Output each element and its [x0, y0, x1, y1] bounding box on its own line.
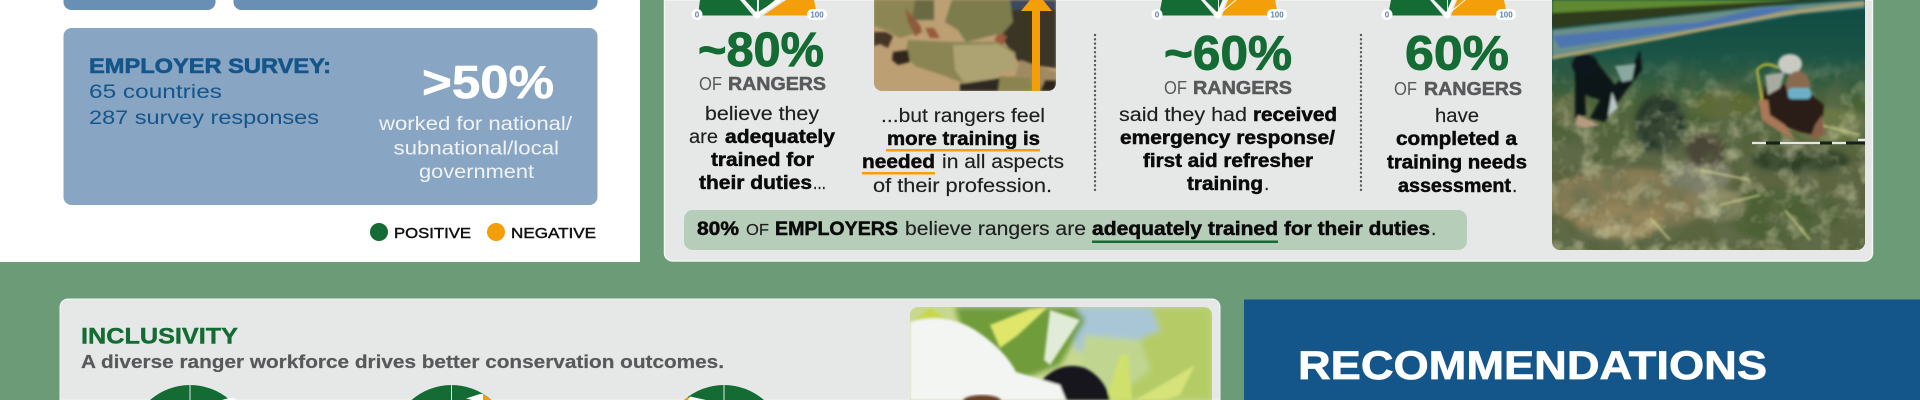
text: more training is needed: in all aspects	[942, 152, 1064, 173]
text: believe they are adequately trained: trained for	[711, 150, 815, 171]
text: received first aid refresher	[1119, 105, 1337, 195]
panel: inclusivity	[60, 299, 1220, 400]
text: more training is needed	[862, 106, 1064, 197]
stat box: right top	[234, 0, 598, 10]
stat: about 60 percent of rangers: ~60%	[1164, 28, 1292, 80]
text: believe they are adequately trained: ...	[813, 173, 826, 194]
employer survey box	[64, 28, 598, 205]
text: received first aid refresher: training	[1187, 174, 1263, 195]
stat: 60 percent of rangers: RANGERS	[1424, 79, 1522, 99]
text: completed a training needs assessment: training needs	[1387, 152, 1527, 174]
text: completed a training needs assessment: completed a	[1396, 129, 1517, 150]
text: believe they are adequately trained	[689, 104, 835, 194]
gauge: first aid training	[1152, 0, 1287, 20]
callout: employers believe rangers are trained: adequately trained	[1092, 219, 1278, 240]
pie chart: right	[684, 385, 764, 400]
arrow: more training needed	[1021, 0, 1052, 91]
stat: about 80 percent of rangers: ~80%	[698, 24, 824, 77]
legend	[370, 223, 596, 242]
stat: about 60 percent of rangers: OF	[1164, 78, 1187, 98]
panel: survey overview	[0, 0, 640, 262]
gauge: training needs assessment	[1382, 0, 1516, 20]
callout: employers believe rangers are trained: for their duties	[1284, 219, 1430, 240]
text: received first aid refresher: emergency response/	[1120, 128, 1336, 149]
text: believe they are adequately trained: believe they	[705, 104, 820, 125]
recommendations heading: RECOMMENDATIONS	[1298, 344, 1767, 388]
inclusivity heading: INCLUSIVITY	[81, 324, 238, 349]
panel: training	[664, 0, 1872, 261]
text: received first aid refresher: first aid refresher	[1143, 151, 1314, 172]
callout: employers believe rangers are trained: 80%	[697, 219, 739, 240]
photo: divers surveying a reef	[1550, 0, 1868, 250]
gauge: adequately trained	[692, 0, 827, 20]
legend: NEGATIVE	[511, 225, 596, 242]
text: received first aid refresher: received	[1253, 105, 1337, 126]
text: more training is needed: of their profession.	[873, 176, 1052, 197]
stat: about 80 percent of rangers: OF	[699, 74, 722, 94]
text: more training is needed: needed	[862, 152, 935, 173]
text: completed a training needs assessment: assessment	[1398, 176, 1512, 197]
text: more training is needed: ...but rangers feel	[881, 106, 1045, 127]
gauge: training needs assessment: 100	[1499, 10, 1513, 20]
stat: about 80 percent of rangers: RANGERS	[728, 74, 826, 94]
gauge: adequately trained: 100	[810, 10, 824, 20]
callout: employers believe rangers are trained	[684, 210, 1467, 250]
legend: POSITIVE	[394, 225, 471, 242]
photo: ranger in white cap among palms	[910, 307, 1212, 400]
inclusivity subtitle: A diverse ranger workforce drives better conservation outcomes.	[81, 352, 724, 372]
text: believe they are adequately trained: are	[689, 127, 718, 148]
text: believe they are adequately trained: adequately	[725, 127, 835, 148]
callout: employers believe rangers are trained: OF	[746, 222, 769, 239]
employer survey details: 287 survey responses	[89, 108, 319, 129]
text: completed a training needs assessment: .	[1512, 176, 1517, 197]
photo: rangers practising first aid	[874, 0, 1056, 91]
employer survey details	[89, 82, 319, 129]
panel: recommendations	[1244, 300, 1920, 400]
stat: about 60 percent of rangers: RANGERS	[1193, 78, 1292, 98]
callout: employers believe rangers are trained: believe rangers are	[905, 219, 1086, 240]
gauge: training needs assessment: 0	[1385, 10, 1390, 20]
stat: over 50 percent: >50%	[422, 56, 554, 108]
stat description: subnational/local	[394, 138, 559, 160]
stat: 60 percent of rangers	[1394, 28, 1522, 99]
text: received first aid refresher: .	[1264, 174, 1269, 195]
gauge: first aid training: 0	[1155, 10, 1160, 20]
stat description	[378, 114, 573, 183]
employer survey heading: EMPLOYER SURVEY:	[89, 55, 331, 78]
employer survey details: 65 countries	[89, 82, 222, 103]
text: received first aid refresher: said they had	[1119, 105, 1247, 126]
pie chart: left	[150, 385, 237, 400]
callout: employers believe rangers are trained: EMPLOYERS	[775, 219, 898, 240]
callout: employers believe rangers are trained: .	[1431, 219, 1436, 240]
text: believe they are adequately trained: their duties	[699, 173, 812, 194]
gauge: adequately trained: 0	[695, 10, 700, 20]
pie chart: middle	[412, 385, 492, 400]
stat box: left top	[64, 0, 216, 10]
text: completed a training needs assessment	[1387, 106, 1527, 197]
text: more training is needed: more training is	[887, 129, 1040, 150]
stat: 60 percent of rangers: OF	[1394, 79, 1417, 99]
stat: 60 percent of rangers: 60%	[1405, 28, 1509, 80]
gauge: first aid training: 100	[1270, 10, 1284, 20]
stat description: worked for national/	[378, 114, 573, 135]
stat description: government	[419, 162, 535, 183]
text: completed a training needs assessment: have	[1435, 106, 1479, 127]
